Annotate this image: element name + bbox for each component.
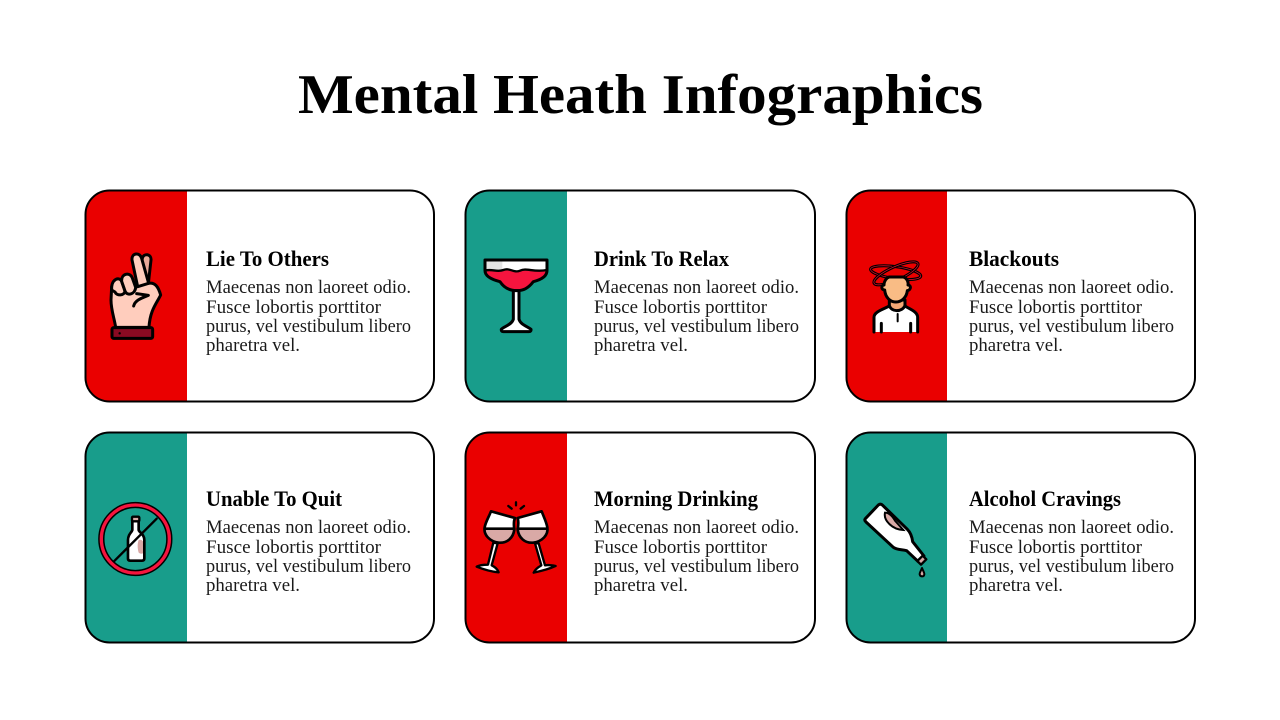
- text block: pharetra vel.: [206, 576, 300, 596]
- icon: clinking wine glasses: [477, 502, 556, 573]
- heading: Unable To Quit: [206, 486, 342, 511]
- text block: [206, 518, 411, 596]
- heading: Blackouts: [969, 246, 1059, 271]
- panel: Blackouts: [846, 190, 1195, 402]
- icon: cocktail glass: [485, 260, 547, 332]
- heading: Lie To Others: [206, 246, 329, 271]
- text block: Maecenas non laoreet odio.: [969, 518, 1174, 538]
- panel: Lie To Others: [86, 190, 434, 402]
- text block: [969, 518, 1174, 596]
- heading: Drink To Relax: [594, 246, 730, 271]
- text block: purus, vel vestibulum libero: [206, 317, 411, 337]
- text block: Fusce lobortis porttitor: [969, 538, 1142, 558]
- heading: Alcohol Cravings: [969, 486, 1121, 511]
- text block: Maecenas non laoreet odio.: [206, 518, 411, 538]
- text block: pharetra vel.: [206, 336, 300, 356]
- title: Mental Heath Infographics: [298, 64, 983, 126]
- text block: purus, vel vestibulum libero: [206, 557, 411, 577]
- text block: purus, vel vestibulum libero: [969, 557, 1174, 577]
- text block: Fusce lobortis porttitor: [594, 298, 767, 318]
- icon: crossed fingers: [111, 254, 161, 338]
- text block: Maecenas non laoreet odio.: [206, 278, 411, 298]
- text block: [969, 278, 1174, 356]
- text block: [206, 278, 411, 356]
- text block: Fusce lobortis porttitor: [969, 298, 1142, 318]
- icon: dizzy person: [870, 257, 922, 332]
- text block: [594, 518, 799, 596]
- panel: Morning Drinking: [466, 432, 815, 642]
- panel: Alcohol Cravings: [846, 432, 1195, 642]
- text block: purus, vel vestibulum libero: [594, 557, 799, 577]
- text block: purus, vel vestibulum libero: [969, 317, 1174, 337]
- panel: Unable To Quit: [86, 432, 434, 642]
- text block: pharetra vel.: [594, 336, 688, 356]
- text block: Maecenas non laoreet odio.: [594, 278, 799, 298]
- text block: Maecenas non laoreet odio.: [594, 518, 799, 538]
- text block: Maecenas non laoreet odio.: [969, 278, 1174, 298]
- icon: pouring bottle: [865, 504, 926, 576]
- panel: Drink To Relax: [466, 190, 815, 402]
- text block: pharetra vel.: [969, 576, 1063, 596]
- text block: purus, vel vestibulum libero: [594, 317, 799, 337]
- text block: [594, 278, 799, 356]
- text block: pharetra vel.: [594, 576, 688, 596]
- text block: Fusce lobortis porttitor: [206, 298, 381, 318]
- text block: pharetra vel.: [969, 336, 1063, 356]
- text block: Fusce lobortis porttitor: [594, 538, 767, 558]
- icon: no bottle sign: [101, 505, 169, 573]
- text block: Fusce lobortis porttitor: [206, 538, 381, 558]
- heading: Morning Drinking: [594, 486, 759, 511]
